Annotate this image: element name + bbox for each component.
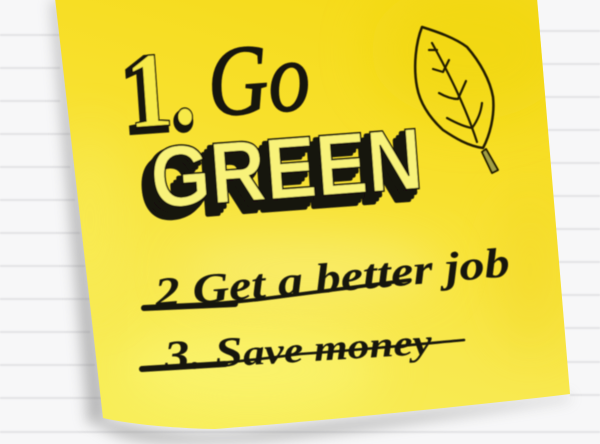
heading: GREEN: GREEN bbox=[147, 110, 426, 227]
crossed-out item: 2 Get a better job: 2 Get a better job bbox=[152, 240, 512, 317]
heading: GREEN: GREEN bbox=[140, 118, 419, 235]
word: Go: Go bbox=[204, 20, 313, 138]
icon: leaf bbox=[415, 27, 498, 173]
crossed-out item: 3. Save money: 3. S ave money bbox=[162, 318, 434, 380]
numeral: 1.: 1. bbox=[117, 29, 198, 158]
heading: 1. Go bbox=[117, 20, 313, 158]
numeral: 1.: 1. bbox=[122, 28, 199, 152]
crossed-out item: 3. Save money bbox=[142, 318, 464, 380]
heading: GREEN: GREEN bbox=[137, 121, 416, 238]
leaf stem bbox=[482, 149, 498, 173]
heading: GREEN: GREEN bbox=[143, 114, 422, 231]
